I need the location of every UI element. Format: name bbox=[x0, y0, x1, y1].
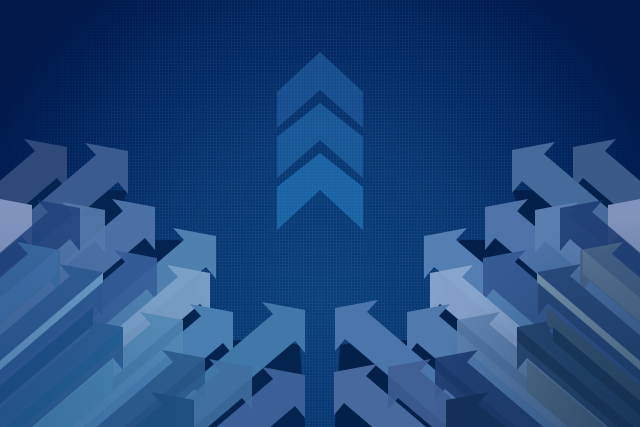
dark backing for left cluster bbox=[0, 178, 305, 427]
arrow: right 4 bbox=[424, 228, 534, 326]
arrow: left 11 bbox=[0, 319, 123, 427]
arrow: left dark overlay bbox=[0, 200, 80, 278]
arrow: bottom right back bbox=[334, 364, 640, 427]
arrow: right 9 bbox=[407, 304, 556, 427]
arrow: left 5 bbox=[42, 202, 105, 270]
arrow: right 12 bbox=[435, 350, 640, 427]
arrow: left 4 bbox=[106, 228, 216, 326]
arrow: left 9 bbox=[84, 304, 233, 427]
arrow: right 6 bbox=[483, 250, 640, 386]
arrow: left 8 bbox=[0, 264, 102, 361]
arrow: bottom right large bbox=[335, 300, 640, 427]
left arrow cluster bbox=[0, 139, 305, 427]
arrow: right pale bbox=[608, 199, 640, 254]
centre chevrons pointing up bbox=[277, 52, 363, 230]
arrow: left pale bbox=[0, 199, 32, 254]
arrow: right top 2 bbox=[512, 142, 640, 276]
arrow: bottom left large bbox=[184, 302, 305, 426]
arrow: right 7 bbox=[580, 242, 640, 324]
arrow: right 5 bbox=[535, 202, 599, 270]
arrow: left 12 bbox=[96, 350, 205, 427]
arrow: left 3 bbox=[0, 199, 155, 336]
arrow: right 11 bbox=[517, 319, 640, 427]
chevron: top bbox=[277, 52, 363, 128]
arrow: right 8 bbox=[538, 264, 640, 381]
right lower shading bbox=[430, 217, 640, 427]
arrow: left top 2 bbox=[0, 143, 128, 276]
dark backing for right cluster bbox=[335, 178, 640, 427]
arrow: right 10 bbox=[457, 312, 608, 427]
left diagonal shaft stripes bbox=[0, 273, 123, 427]
arrow: left top 1 bbox=[0, 139, 67, 204]
arrow: right top 1 bbox=[573, 139, 640, 204]
arrow: right light bbox=[430, 265, 569, 394]
left lower shading bbox=[0, 291, 140, 427]
arrow: left 10 bbox=[32, 312, 183, 427]
chevron: bottom bbox=[277, 153, 363, 230]
arrow: bottom left back bbox=[216, 367, 305, 427]
arrow: right dark overlay bbox=[560, 200, 640, 278]
arrow: right 3 bbox=[485, 199, 640, 336]
arrow: left 7 bbox=[0, 242, 60, 323]
chevron: middle bbox=[277, 103, 363, 178]
right arrow cluster bbox=[334, 139, 640, 427]
arrow: left 14 bbox=[136, 392, 194, 427]
right diagonal shaft stripes bbox=[517, 250, 640, 427]
arrow: left 13 bbox=[188, 359, 252, 427]
arrow: left 6 bbox=[0, 250, 157, 408]
arrow: left light bbox=[32, 265, 210, 427]
arrow: right 14 bbox=[446, 392, 640, 427]
arrow: right 13 bbox=[388, 359, 640, 427]
